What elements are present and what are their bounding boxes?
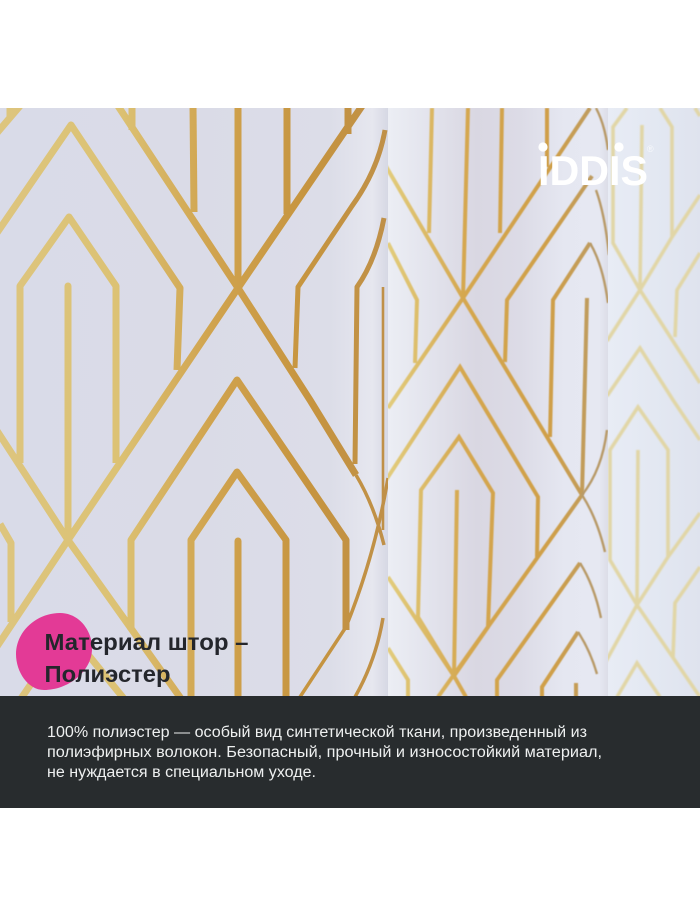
pink blob accent xyxy=(16,613,92,690)
panel: middle curtain fold xyxy=(384,108,609,697)
heading: Полиэстер xyxy=(44,661,170,687)
logo: iddis: ® xyxy=(647,144,654,154)
panel: right curtain fold xyxy=(605,108,700,697)
dark description band xyxy=(0,696,700,808)
logo: iddis: IDDIS xyxy=(538,147,648,194)
description text: 100% полиэстер — особый вид синтетической ткани, произведенный из xyxy=(47,724,587,741)
panel: left curtain fold xyxy=(0,106,388,700)
description text xyxy=(47,724,602,781)
description text: полиэфирных волокон. Безопасный, прочный и износостойкий материал, xyxy=(47,744,602,761)
description text: не нуждается в специальном уходе. xyxy=(47,764,316,781)
heading xyxy=(44,629,249,687)
infographic canvas xyxy=(0,108,700,808)
heading: Материал штор – xyxy=(44,629,249,655)
